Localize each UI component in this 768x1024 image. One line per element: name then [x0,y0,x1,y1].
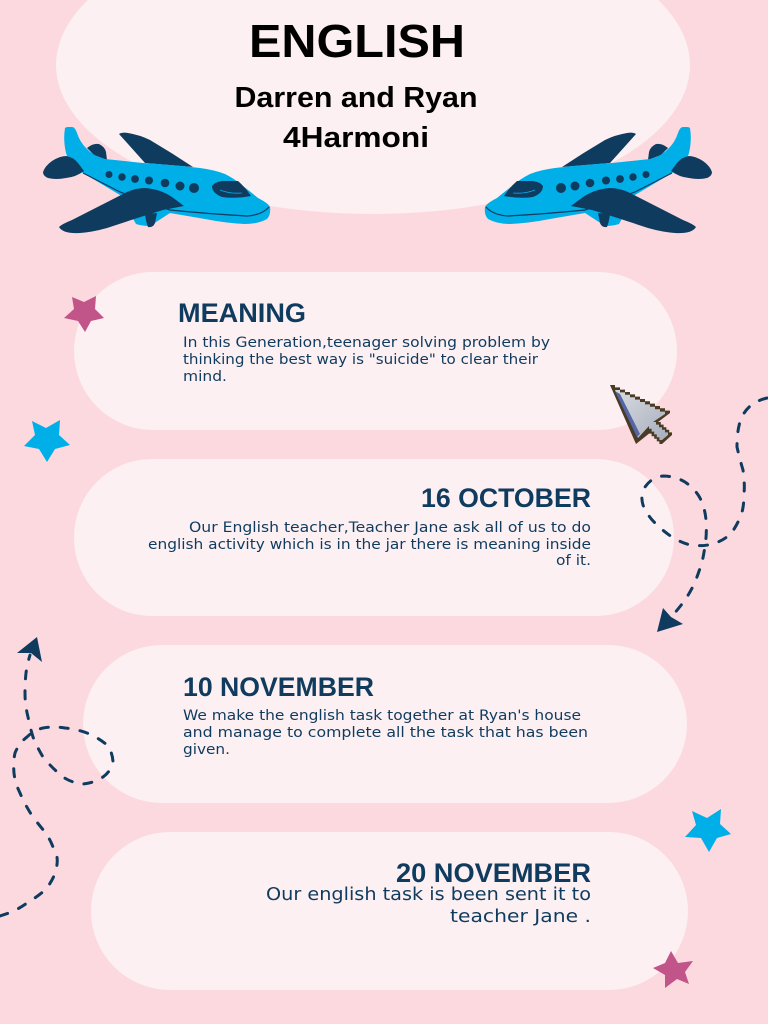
heading: 20 november: 20 NOVEMBER [396,858,591,888]
text: 16 october body: of it. [556,553,591,569]
text: meaning body: mind. [183,369,227,385]
text: 10 november body: and manage to complete all the task that has been [183,725,588,741]
text: 16 october body: english activity which is in the jar there is meaning inside [148,537,591,553]
title: ENGLISH [249,15,465,67]
text: 10 november body: given. [183,742,230,758]
text: 16 october body: Our English teacher,Teacher Jane ask all of us to do [189,520,591,536]
panel: 20 november [91,832,688,990]
text: meaning body: thinking the best way is "suicide" to clear their [183,352,538,368]
icon: pink star bottom right [653,951,693,988]
heading: meaning: MEANING [178,298,306,328]
text: 16 october body [148,520,591,569]
icon: blue star left [24,420,70,462]
panel: 10 november [83,645,687,803]
text: 20 november body: Our english task is been sent it to [266,884,591,905]
header ellipse panel [56,0,690,214]
arrow: dashed loop left [0,637,113,916]
icon: left airplane [43,127,270,233]
icon: blue star right [685,809,731,852]
text: 20 november body: teacher Jane . [450,906,591,927]
heading: 16 october: 16 OCTOBER [421,483,591,513]
authors [234,82,478,154]
text: 20 november body [266,884,591,927]
text: 10 november body: We make the english task together at Ryan's house [183,708,581,724]
text: meaning body [183,335,550,385]
icon: right airplane [485,127,712,233]
heading: 10 november: 10 NOVEMBER [183,672,374,702]
arrowhead right [657,608,683,632]
panel: 16 october [74,459,674,616]
arrowhead left [17,637,42,662]
authors: Darren and Ryan [234,82,478,114]
arrow: dashed loop right [642,398,767,632]
text: meaning body: In this Generation,teenager solving problem by [183,335,550,351]
icon: pink star top left [64,296,104,332]
text: 10 november body [183,708,588,758]
icon: pixel cursor [610,385,672,444]
authors: 4Harmoni [283,122,429,154]
panel: meaning [74,272,677,430]
